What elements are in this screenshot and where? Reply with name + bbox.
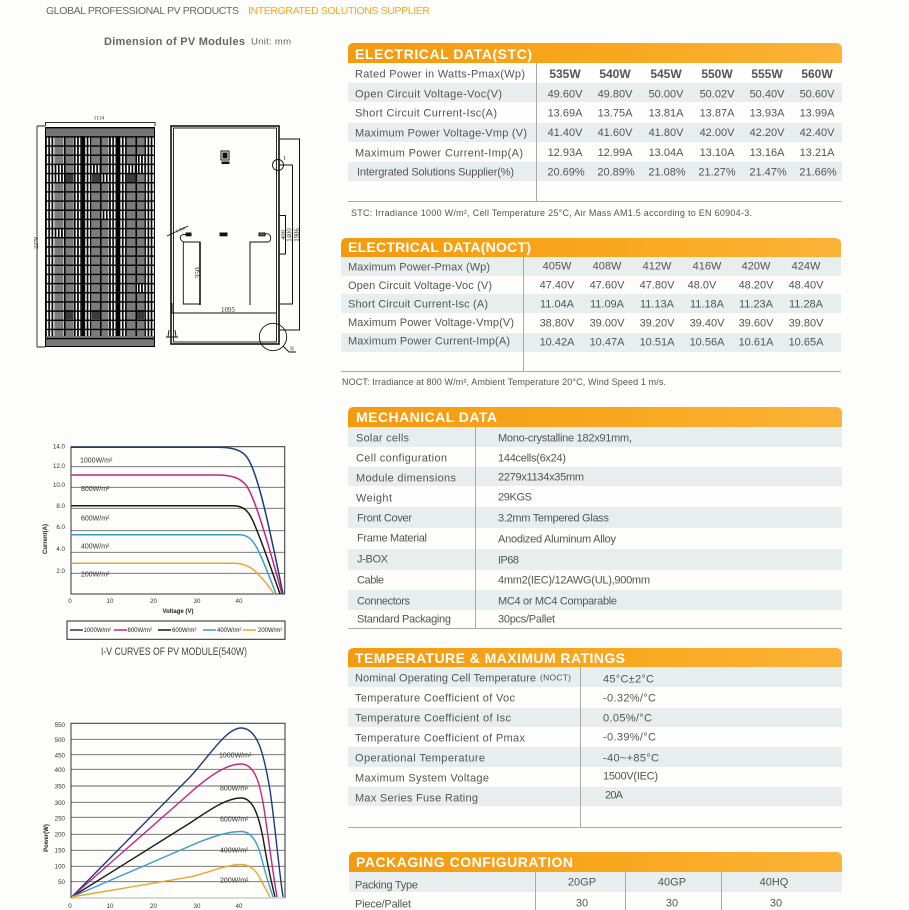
row: efficiency: 21.47% [749,167,787,179]
row: coefficient of Isc: Temperature Coefficient of Isc [355,713,512,725]
drawing: module front view [34,116,155,347]
chart: P-V curves: 50 [58,879,66,886]
caption: I-V curves: I-V CURVES OF PV MODULE(540W) [101,646,247,658]
drawing: module back view: 400 [280,230,287,240]
chart: P-V curves [44,722,285,910]
row: short circuit current: 13.75A [598,108,633,120]
row: frame material: Frame Material [357,533,427,545]
row: operational temperature: Operational Temperature [355,753,485,765]
note: STC conditions: STC: Irradiance 1000 W/m², Cell Temperature 25°C, Air Mass AM1.5 according to EN 60904-3. [351,208,752,218]
note: NOCT conditions: NOCT: Irradiance at 800 W/m², Ambient Temperature 20°C, Wind Speed 1 m/s. [342,377,666,387]
row: cell configuration [356,453,566,465]
row: short circuit current: 11.09A [590,299,625,311]
chart: I-V curves: 2.0 [56,568,66,575]
row: standard packaging: Standard Packaging [357,614,451,626]
row: efficiency: 20.89% [597,167,635,179]
drawing: module back view: 350 [193,267,202,279]
row: rated power: 535W [549,67,581,81]
row: module dimensions: 2279x1134x35mm [498,472,584,484]
row: maximum power: 424W [792,261,821,273]
row: module dimensions [356,472,584,485]
row: efficiency [357,167,837,179]
row: frame material: Anodized Aluminum Alloy [498,534,616,546]
row: piece per pallet: 30 [576,898,588,910]
row: short circuit current: 13.99A [800,108,835,120]
row: cell configuration: 144cells(6x24) [498,453,566,465]
header: temperature and maximum ratings [348,648,842,667]
chart: P-V curves: 1000W/m² [219,752,252,760]
chart: P-V curves: 0 [68,903,72,910]
row: short circuit current [348,299,824,311]
heading: dimension of PV modules: Unit: mm [251,36,291,48]
row: max series fuse rating [355,790,624,805]
chart: I-V curves: 0 [68,598,72,605]
chart: I-V curves: 600W/m² [81,516,110,522]
drawing: module back view [166,126,301,352]
row: coefficient of Isc: 0.05%/°C [603,713,652,725]
drawing: module front view: 2279 [34,237,40,249]
row: maximum power: 416W [693,261,722,273]
drawing: module back view: I [284,156,286,162]
row: rated power: 560W [801,67,833,81]
top tagline: GLOBAL PROFESSIONAL PV PRODUCTS [46,5,239,17]
row: rated power: 540W [599,67,631,81]
chart: I-V curves: Voltage (V) [163,609,193,615]
row: rated power: 545W [650,67,682,81]
chart: I-V curves: 12.0 [53,463,66,470]
chart: I-V curves: 14.0 [53,444,66,451]
row: maximum power current: 10.61A [739,337,774,349]
chart: P-V curves: 200W/m² [220,878,249,884]
row: frame material [357,533,616,546]
row: efficiency: 20.69% [547,167,585,179]
row: weight: Weight [356,493,392,505]
row: open circuit voltage: Open Circuit Voltage-Voc(V) [355,89,502,101]
row: connectors: Connectors [357,596,410,608]
chart: I-V curves: 4.0 [56,546,66,553]
panel: mechanical data [348,407,842,628]
row: module dimensions: Module dimensions [356,473,456,485]
row: maximum power voltage: 39.60V [739,318,774,330]
row: cell configuration: Cell configuration [356,453,447,465]
row: maximum power voltage [355,127,835,140]
drawing: module front view: 1134 [94,116,105,122]
legend: I-V curves [67,621,285,639]
chart: P-V curves: 40 [236,903,243,910]
row: maximum power voltage: 39.00V [590,318,625,330]
chart: P-V curves: 400W/m² [220,848,249,854]
row: maximum power voltage: 41.60V [598,127,633,139]
legend: I-V curves: 1000W/m² [84,628,111,634]
row: maximum power current: 10.42A [540,337,575,349]
row: maximum power current: 10.51A [640,337,675,349]
chart: P-V curves: Power(W) [44,824,50,852]
row: front cover [357,513,610,525]
chart: P-V curves: 30 [194,903,201,910]
row: cable [357,575,650,587]
row: maximum power voltage: 39.40V [690,318,725,330]
legend: I-V curves: 600W/m² [172,628,196,634]
chart: P-V curves: 450 [55,752,66,760]
row: short circuit current: 11.28A [789,299,824,311]
row: cable: Cable [357,575,384,587]
row: efficiency: Intergrated Solutions Supplier(%) [357,167,514,179]
chart: P-V curves: 550 [55,722,66,729]
header: mechanical data [348,407,842,427]
header: electrical data STC [348,43,842,63]
row: open circuit voltage [355,89,835,101]
header: packaging configuration [349,852,842,872]
chart: P-V curves: 800W/m² [220,786,249,792]
row: open circuit voltage: 48.20V [739,280,774,292]
chart: I-V curves: 8.0 [56,503,66,510]
heading: dimension of PV modules: Dimension of PV Modules [104,36,245,48]
row: rated power: 550W [701,67,733,81]
chart: P-V curves: 200 [55,832,66,838]
row: maximum power current: 10.56A [690,337,725,349]
row: nominal operating cell temperature: Nominal Operating Cell Temperature [355,673,536,685]
row: open circuit voltage: 48.40V [789,280,824,292]
row: maximum power current: 13.16A [750,147,785,159]
row: open circuit voltage: 47.40V [540,280,575,292]
panel: temperature and maximum ratings [348,648,842,828]
row: coefficient of Voc [355,693,656,705]
drawing: module back view: 1095 [221,306,236,314]
row: short circuit current: 13.81A [649,108,684,120]
row: cable: 4mm2(IEC)/12AWG(UL),900mm [498,575,650,587]
drawing: module back view: 1400 [286,228,294,242]
row: coefficient of Pmax [355,732,656,745]
chart: P-V curves: 400 [55,767,66,774]
chart: P-V curves: 500 [55,737,66,744]
row: maximum power voltage: 41.80V [649,127,684,139]
row: short circuit current: 13.69A [548,108,583,120]
header: electrical data NOCT: ELECTRICAL DATA(NOCT) [348,239,531,255]
chart: I-V curves: 10.0 [53,482,66,489]
header: electrical data STC: ELECTRICAL DATA(STC) [355,46,532,62]
row: efficiency: 21.27% [698,167,736,179]
row: max series fuse rating: Max Series Fuse Rating [355,793,478,805]
chart: P-V curves: 150 [55,848,66,854]
row: maximum power [348,261,821,274]
row: short circuit current: 13.93A [750,108,785,120]
row: maximum system voltage: Maximum System Voltage [355,773,489,785]
row: nominal operating cell temperature [355,672,654,686]
row: open circuit voltage: 49.60V [548,89,583,101]
row: open circuit voltage: 48.0V [688,280,717,292]
row: maximum power current: 10.65A [789,337,824,349]
chart: I-V curves: 200W/m² [81,572,110,578]
chart: I-V curves: 400W/m² [81,544,110,550]
row: maximum power voltage: 39.20V [640,318,675,330]
legend: I-V curves: 400W/m² [217,628,241,634]
chart: P-V curves: 300 [55,800,66,807]
row: maximum power current: 12.93A [548,147,583,159]
row: maximum power current: 13.04A [649,147,684,159]
row: open circuit voltage: 50.40V [750,89,785,101]
row: maximum power voltage: 42.20V [750,127,785,139]
row: maximum power voltage: 38.80V [540,318,575,330]
legend: I-V curves: 800W/m² [128,628,152,634]
header: electrical data NOCT [341,238,841,257]
row: piece per pallet: 30 [770,898,782,910]
drawing: module back view: 1986 [294,228,301,242]
chart: P-V curves: 250 [55,816,66,822]
header: temperature and maximum ratings: TEMPERATURE & MAXIMUM RATINGS [355,650,625,666]
chart: I-V curves: 1000W/m² [80,458,113,464]
row: rated power [355,67,833,81]
header: packaging configuration: PACKAGING CONFIGURATION [356,854,573,870]
row: maximum power voltage: Maximum Power Voltage-Vmp (V) [355,128,527,140]
row: packing type: Packing Type [355,880,418,892]
legend: I-V curves: 200W/m² [258,628,282,634]
row: coefficient of Pmax: Temperature Coefficient of Pmax [355,733,526,745]
header: mechanical data: MECHANICAL DATA [356,409,497,425]
chart: P-V curves: 350 [55,784,66,790]
row: maximum power current [348,336,824,349]
row: short circuit current: Short Circuit Current-Isc(A) [355,108,497,120]
row: maximum power: 405W [543,261,572,273]
row: connectors: MC4 or MC4 Comparable [498,596,617,608]
chart: P-V curves: 20 [150,903,157,910]
row: J-BOX [357,554,519,567]
row: maximum power voltage: 41.40V [548,127,583,139]
row: rated power: 555W [751,67,783,81]
drawing: module back view: 1.0m [175,226,187,235]
row: front cover: Front Cover [357,513,412,525]
row: coefficient of Voc: Temperature Coefficient of Voc [355,693,516,705]
row: packing type: 20GP [568,877,596,889]
row: open circuit voltage: 50.02V [700,89,735,101]
row: maximum power current: 13.21A [800,147,835,159]
row: operational temperature [355,753,659,765]
row: open circuit voltage [348,280,824,292]
row: weight [356,492,532,505]
row: efficiency: 21.66% [799,167,837,179]
row: short circuit current [355,108,835,120]
row: maximum power: 412W [643,261,672,273]
row: maximum power voltage [348,317,824,330]
drawing: module back view: II [290,346,294,352]
row: short circuit current: 11.18A [690,299,725,311]
row: solar cells: Mono-crystalline 182x91mm, [498,433,632,445]
row: rated power: Rated Power in Watts-Pmax(Wp) [355,69,525,81]
chart: I-V curves: Current(A) [43,524,49,554]
row: coefficient of Voc: -0.32%/°C [603,693,656,705]
chart: I-V curves: 30 [194,598,201,605]
row: standard packaging [357,614,555,626]
row: maximum power current: Maximum Power Current-Imp(A) [355,148,523,160]
chart: I-V curves: 10 [107,598,114,605]
row: weight: 29KGS [498,492,532,504]
row: connectors [357,596,617,608]
chart: P-V curves: 10 [107,903,114,910]
row: maximum power current: Maximum Power Current-Imp(A) [348,336,510,348]
row: solar cells [356,433,632,445]
row: open circuit voltage: 47.80V [640,280,675,292]
row: maximum power current: 12.99A [598,147,633,159]
row: maximum system voltage [355,771,658,785]
row: coefficient of Pmax: -0.39%/°C [603,732,656,744]
row: maximum power current: 13.10A [700,147,735,159]
row: short circuit current: Short Circuit Current-Isc (A) [348,299,488,311]
row: operational temperature: -40~+85°C [603,753,659,765]
row: maximum power: Maximum Power-Pmax (Wp) [348,262,490,274]
panel: electrical data STC [348,43,842,218]
row: open circuit voltage: 50.00V [649,89,684,101]
panel: electrical data NOCT [341,238,841,387]
row: maximum power: 420W [742,261,771,273]
row: efficiency: 21.08% [648,167,686,179]
row: maximum power: 408W [593,261,622,273]
row: nominal operating cell temperature: 45°C±2°C [603,674,654,686]
row: max series fuse rating: 20A [605,790,624,802]
row: packing type: 40GP [658,877,686,889]
row: maximum power voltage: 39.80V [789,318,824,330]
row: short circuit current: 11.23A [739,299,774,311]
row: short circuit current: 11.13A [640,299,675,311]
row: open circuit voltage: 50.60V [800,89,835,101]
row: J-BOX: IP68 [498,555,519,567]
chart: I-V curves: 20 [150,598,157,605]
chart: I-V curves [43,444,285,615]
row: maximum power voltage: Maximum Power Voltage-Vmp(V) [348,317,514,329]
row: J-BOX: J-BOX [357,554,389,566]
row: short circuit current: 13.87A [700,108,735,120]
row: short circuit current: 11.04A [540,299,575,311]
row: maximum system voltage: 1500V(IEC) [603,771,658,783]
row: front cover: 3.2mm Tempered Glass [498,513,610,525]
row: maximum power voltage: 42.00V [700,127,735,139]
row: coefficient of Isc [355,713,652,725]
chart: P-V curves: 600W/m² [220,816,249,824]
row: packing type: 40HQ [760,877,789,889]
top tagline [46,5,430,17]
panel: packaging configuration [349,852,842,910]
chart: I-V curves: 800W/m² [81,486,110,493]
row: solar cells: Solar cells [356,433,410,445]
row: maximum power current: 10.47A [590,337,625,349]
chart: P-V curves: 100 [55,864,66,870]
row: maximum power current [355,147,835,160]
row: nominal operating cell temperature: (NOCT) [540,672,571,682]
chart: I-V curves: 6.0 [56,524,66,531]
row: standard packaging: 30pcs/Pallet [498,614,555,626]
row: piece per pallet [355,898,782,910]
row: open circuit voltage: 47.60V [590,280,625,292]
row: packing type [355,877,789,892]
row: open circuit voltage: Open Circuit Voltage-Voc (V) [348,280,492,292]
row: maximum power voltage: 42.40V [800,127,835,139]
row: open circuit voltage: 49.80V [598,89,633,101]
top tagline: INTERGRATED SOLUTIONS SUPPLIER [248,5,430,17]
chart: I-V curves: 40 [236,598,243,605]
row: piece per pallet: 30 [666,898,678,910]
